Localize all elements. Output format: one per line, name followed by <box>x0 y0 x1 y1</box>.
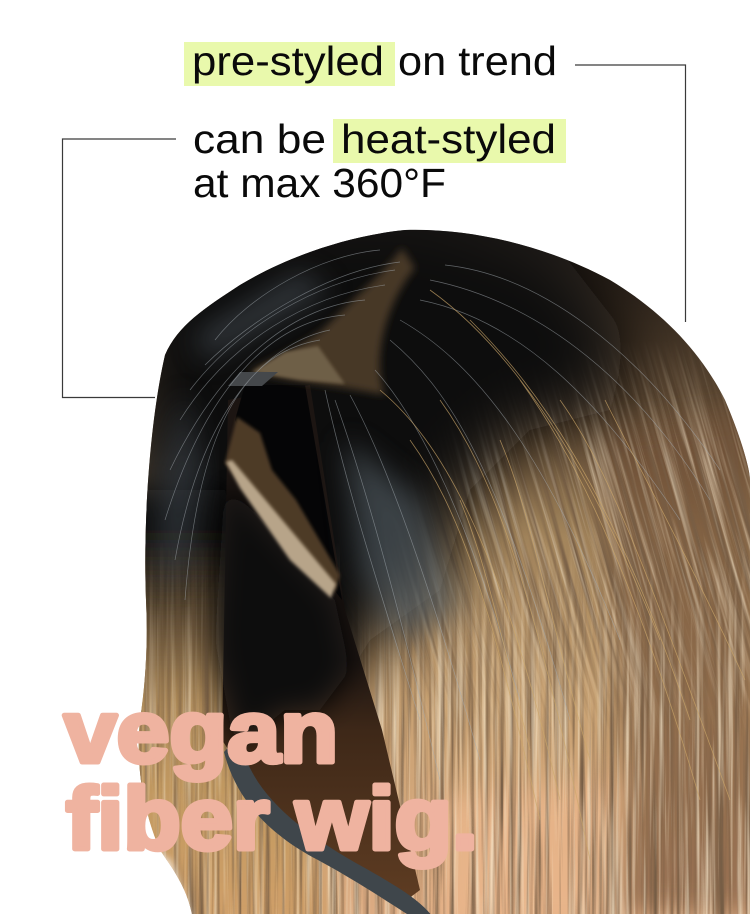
left blond streaks <box>139 570 340 914</box>
left blond section <box>110 490 340 914</box>
highlight: pre-styled <box>184 42 395 86</box>
callout: pre-styled on trend <box>184 38 686 322</box>
grey sheen on dark hair <box>345 440 460 640</box>
text: pre-styled: pre-styled <box>192 38 384 84</box>
text: at max 360°F: at max 360°F <box>193 160 446 206</box>
callout: heat-styled <box>62 116 566 398</box>
hair base ombre <box>130 220 750 914</box>
headband <box>224 740 432 914</box>
black back hair <box>215 480 350 750</box>
leader line: right <box>575 65 686 322</box>
lace part <box>248 248 415 395</box>
wispy edge haze <box>640 268 725 380</box>
wig photo <box>138 230 750 914</box>
vertical streak textures <box>140 562 750 914</box>
highlight: heat-styled <box>333 119 566 163</box>
text: on trend: on trend <box>398 38 557 84</box>
under cap shadow <box>222 385 420 905</box>
lace strip <box>225 417 340 592</box>
text: heat-styled: heat-styled <box>341 116 556 162</box>
peach tips <box>430 780 620 914</box>
headline: vegan fiber wig. <box>64 682 478 868</box>
slanted streak textures <box>394 354 750 721</box>
brown shade on right side <box>590 410 750 914</box>
black roots <box>130 210 630 720</box>
leader line: left <box>62 139 176 398</box>
text: can be: can be <box>193 116 326 162</box>
golden strands <box>380 290 745 860</box>
headline line 1: vegan <box>64 682 338 781</box>
grey-white strands <box>165 250 720 780</box>
headline line 2: fiber wig. <box>66 769 478 868</box>
